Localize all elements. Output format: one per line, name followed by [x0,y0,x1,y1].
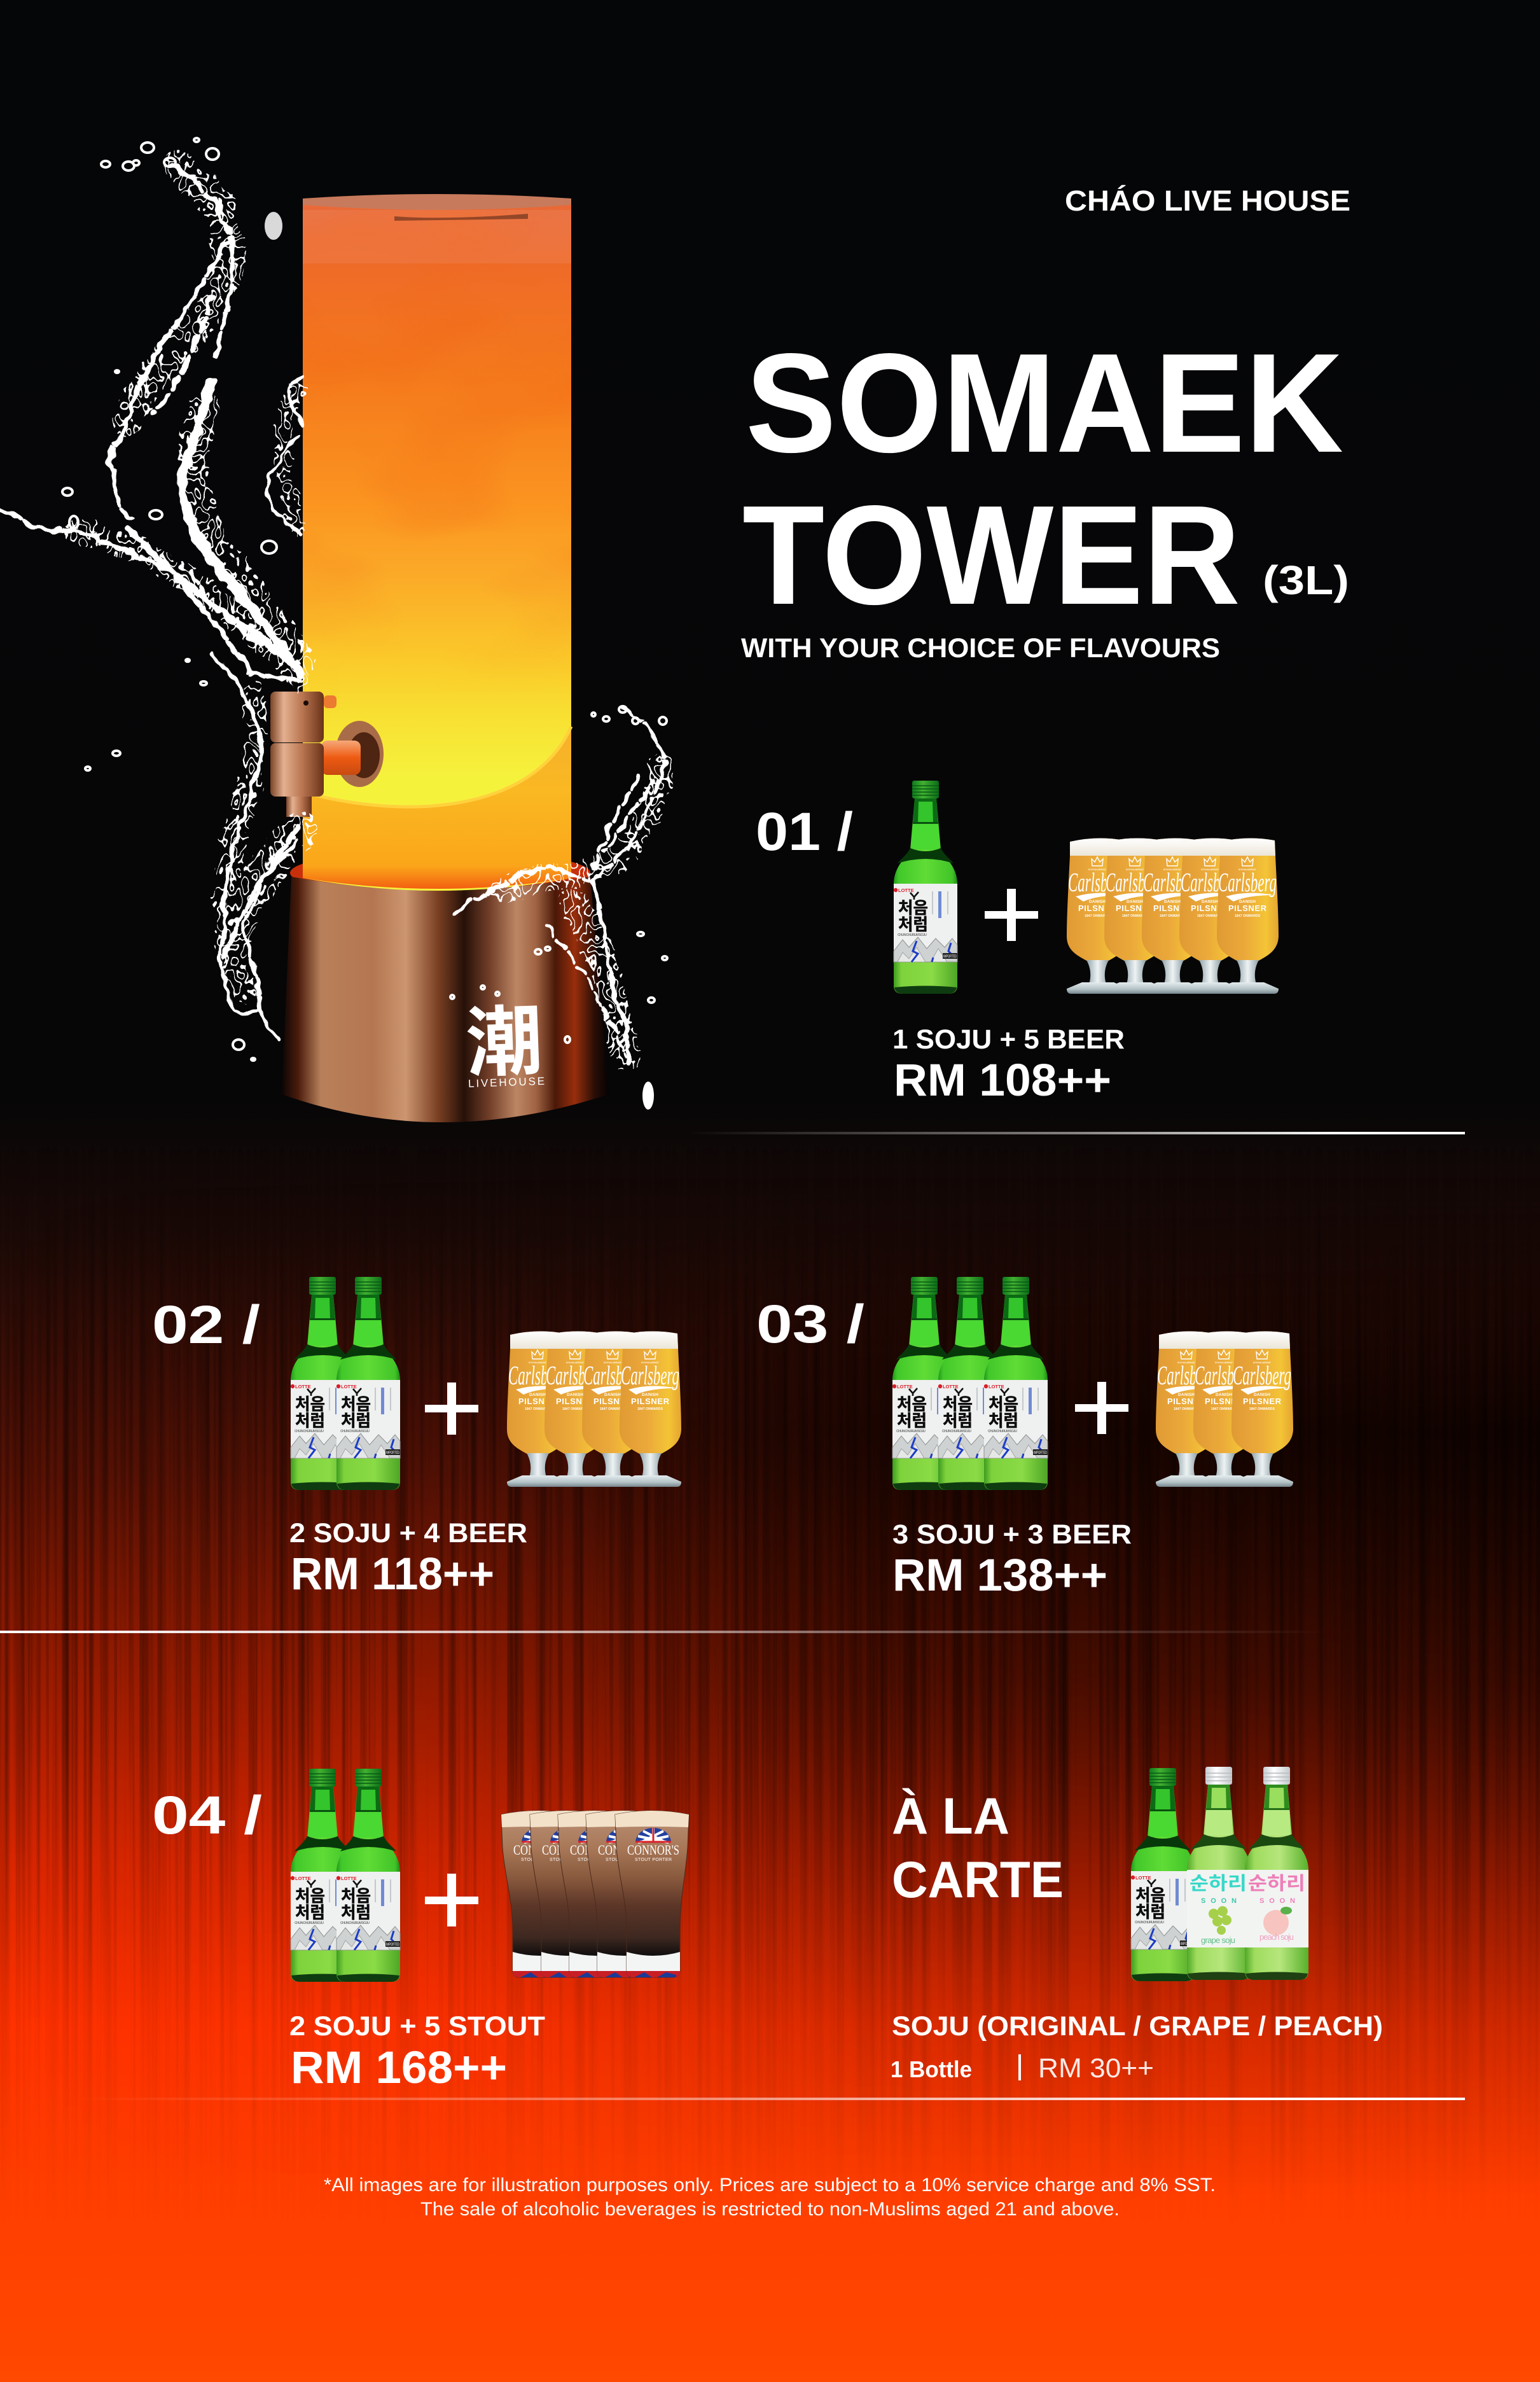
two soju bottles [291,1769,400,1982]
water splash left [0,164,302,1040]
footnote: The sale of alcoholic beverages is restricted to non-Muslims aged 21 and above. [420,2199,1120,2220]
price: RM 108++ [894,1055,1111,1106]
title: (3L) [1263,557,1349,603]
logo on tower base: 潮 [464,979,545,1092]
combo label: 2 SOJU + 4 BEER [289,1518,527,1549]
title: SOMAEK [746,324,1343,482]
five stout glasses [501,1811,689,1977]
heading: À LA [892,1788,1009,1845]
number 02: 02 / [152,1295,260,1355]
grape soju bottle: 순하리 [1190,1873,1247,1894]
combo label: 2 SOJU + 5 STOUT [289,2011,545,2042]
combo label: 1 SOJU + 5 BEER [892,1024,1125,1055]
copper tower base [282,850,609,1122]
footnote: *All images are for illustration purposes only. Prices are subject to a 10% service charge and 8% SST. [324,2175,1216,2196]
peach soju bottle [1245,1767,1308,1980]
water blobs [265,212,654,1110]
panel: option 04 [152,1769,689,2093]
product label: SOJU (ORIGINAL / GRAPE / PEACH) [892,2011,1383,2042]
glass tower filled with orange liquid [303,194,571,891]
number 04: 04 / [152,1785,262,1845]
footnote [324,2175,1216,2220]
two soju bottles [291,1277,400,1490]
heading [892,1788,1064,1909]
combo label: 3 SOJU + 3 BEER [892,1519,1132,1550]
original soju bottle [1131,1768,1195,1981]
water splash right [454,708,665,1065]
background gradient [0,1141,1540,2382]
four beer glasses [507,1331,681,1487]
panel: a la carte [891,1767,1383,2084]
price: RM 118++ [291,1549,494,1599]
logo on tower base: LIVEHOUSE [468,1075,545,1090]
soju bottle [894,781,957,994]
grape soju bottle: S O O N [1201,1897,1237,1905]
peach soju bottle: S O O N [1259,1897,1295,1905]
heading: CARTE [892,1851,1064,1909]
number 03: 03 / [756,1294,864,1354]
panel: option 02 [152,1277,681,1599]
title [742,324,1349,634]
water droplets [62,138,667,1061]
peach soju bottle: 순하리 [1248,1873,1305,1894]
panel: option 03 [756,1277,1293,1601]
five beer glasses [1067,838,1279,994]
plus sign [425,1383,478,1435]
price: RM 138++ [892,1550,1107,1601]
plus sign [425,1874,478,1926]
bottle price: RM 30++ [1038,2053,1154,2084]
bottle size: 1 Bottle [891,2056,972,2082]
title: TOWER [742,477,1240,634]
number 01: 01 / [756,802,853,861]
illustration: somaek beer tower with water splash [0,138,667,1122]
plus sign [985,889,1038,941]
copper tap [270,692,384,817]
panel: option 01 [756,781,1279,1106]
grape soju bottle: grape soju [1201,1935,1235,1945]
venue name: CHÁO LIVE HOUSE [1065,185,1350,217]
three soju bottles [892,1277,1048,1490]
peach soju bottle: peach soju [1259,1932,1294,1942]
plus sign [1075,1382,1128,1434]
three beer glasses [1156,1331,1293,1487]
subtitle: WITH YOUR CHOICE OF FLAVOURS [741,633,1220,664]
price: RM 168++ [291,2043,507,2093]
grape soju bottle [1187,1767,1251,1980]
